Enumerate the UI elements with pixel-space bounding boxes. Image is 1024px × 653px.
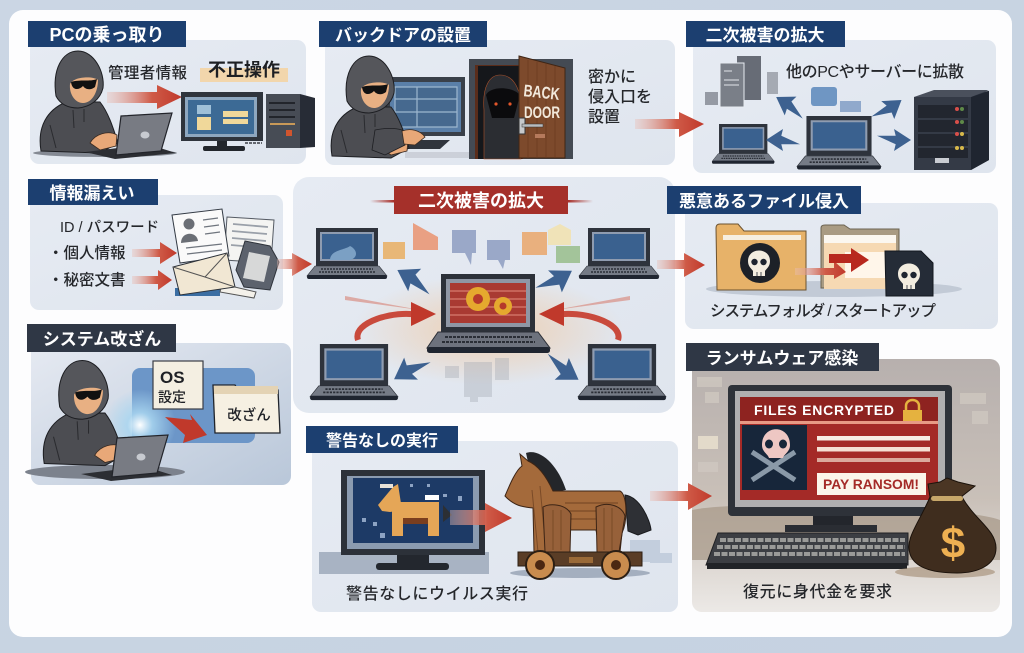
icon: bottom-left laptop xyxy=(310,344,398,400)
callout: pay ransom: PAY RANSOM! xyxy=(823,476,919,492)
arrow: centre to malicious file xyxy=(657,253,705,277)
heading: system tampering: システム改ざん xyxy=(43,329,161,349)
heading: secondary damage red xyxy=(370,186,593,214)
icon: monitor with horse xyxy=(341,470,485,570)
icon: hacker at keyboard xyxy=(331,56,425,158)
callout: tampered folder xyxy=(213,385,280,433)
icons: floating files xyxy=(383,223,580,269)
callout: unauthorized operation: 不正操作 xyxy=(208,60,280,80)
glow xyxy=(104,389,176,461)
icon: back door: DOOR xyxy=(524,103,560,122)
arrows: blue spread arrows xyxy=(766,88,911,151)
icon: chat bubbles xyxy=(811,87,861,112)
icon: server rack xyxy=(914,90,989,170)
text: covertly install entry point: 密かに xyxy=(588,68,636,86)
arrows xyxy=(132,242,177,290)
heading: execution without warning: 警告なしの実行 xyxy=(326,431,438,450)
panel: backdoor xyxy=(319,21,675,165)
heading: secondary damage red: 二次被害の拡大 xyxy=(418,191,544,211)
panel: secondary damage spread xyxy=(686,21,996,173)
callout: OS note: OS xyxy=(160,368,185,387)
shadow xyxy=(706,281,962,297)
icon: grey documents and servers xyxy=(705,56,778,107)
text: leak list xyxy=(48,219,159,289)
heading: data leak: 情報漏えい xyxy=(50,184,134,203)
heading: backdoor install: バックドアの設置 xyxy=(335,26,471,45)
icon: documents and envelope xyxy=(172,209,279,298)
icon: hacker with laptop xyxy=(25,361,185,481)
callout: OS note: 設定 xyxy=(158,389,186,405)
icon: top-left laptop xyxy=(307,228,387,279)
heading: data leak xyxy=(28,179,158,205)
icon: top-right laptop xyxy=(579,228,659,279)
icon: desktop PC xyxy=(181,92,315,151)
heading: secondary damage: 二次被害の拡大 xyxy=(706,25,824,45)
arrow: backdoor to secondary damage xyxy=(635,112,704,137)
text: spread to other PCs and servers: 他のPCやサーバーに拡散 xyxy=(786,63,964,81)
icon: bottom-right laptop xyxy=(578,344,666,400)
heading: PC takeover xyxy=(28,21,186,47)
icon: trojan horse xyxy=(505,452,651,579)
icon: skull and crossbones xyxy=(742,425,807,490)
arrow xyxy=(450,503,512,532)
heading: system tampering xyxy=(27,324,176,352)
icon: left laptop xyxy=(712,124,774,164)
text: leak list: ・個人情報 xyxy=(48,244,126,262)
background shapes behind horse xyxy=(630,540,672,563)
desk xyxy=(692,505,1000,560)
icon: faint city silhouette xyxy=(445,358,509,402)
icon: padlock xyxy=(903,400,922,421)
heading: execution without warning xyxy=(306,426,458,453)
panel: execution without warning xyxy=(306,426,678,612)
arrow xyxy=(165,414,207,443)
icon: keyboard xyxy=(706,533,908,569)
arrow: execution to ransomware xyxy=(650,483,712,510)
heading: secondary damage xyxy=(686,21,845,47)
icon: back door: BACK xyxy=(523,81,561,104)
icon: money bag xyxy=(895,478,996,578)
icon: hacker with laptop xyxy=(33,51,177,159)
icon: back door xyxy=(469,56,573,159)
arrow xyxy=(107,85,182,109)
heading: malicious file: 悪意あるファイル侵入 xyxy=(679,191,849,211)
icon: monitor with ransom screen: FILES ENCRYPTED xyxy=(754,402,894,418)
heading: backdoor install xyxy=(319,21,487,47)
panel: system tampering xyxy=(25,324,291,485)
icon: monitor with ransom screen xyxy=(728,385,952,532)
heading: ransomware infection: ランサムウェア感染 xyxy=(706,348,858,368)
panel: malicious file intrusion xyxy=(667,186,998,329)
callout: tampered folder: 改ざん xyxy=(227,406,271,424)
icon: skull folder xyxy=(716,224,806,290)
text: covertly install entry point xyxy=(588,68,652,126)
panel: centre secondary damage xyxy=(293,177,675,413)
panel: data leak xyxy=(28,179,283,310)
icon: skull file xyxy=(885,251,933,296)
text: covertly install entry point: 設置 xyxy=(588,108,620,126)
glow behind central laptop xyxy=(353,275,623,385)
heading: malicious file xyxy=(667,186,861,214)
arrows: blue outward arrows xyxy=(387,259,586,391)
text: leak list: ID / パスワード xyxy=(60,219,159,236)
text: virus runs without warning: 警告なしにウイルス実行 xyxy=(346,584,528,603)
arrows: file moving xyxy=(795,248,869,279)
callout: OS note xyxy=(153,361,203,409)
wall bricks xyxy=(697,377,988,472)
text: leak list: ・秘密文書 xyxy=(48,271,126,289)
panel: ransomware infection xyxy=(686,343,1000,612)
text: covertly install entry point: 侵入口を xyxy=(588,88,652,106)
arrow: data leak to centre xyxy=(277,253,312,276)
heading: PC takeover: PCの乗っ取り xyxy=(49,25,165,45)
panel: PC takeover xyxy=(28,21,315,164)
callout: pay ransom xyxy=(817,473,926,495)
text: system folder / startup: システムフォルダ / スタートアップ xyxy=(710,301,936,320)
text: admin info: 管理者情報 xyxy=(108,64,187,82)
icon: money bag: $ xyxy=(941,519,965,568)
icon: open folder xyxy=(821,225,899,289)
text: ransom demand: 復元に身代金を要求 xyxy=(743,583,892,601)
icon: blue backdrop xyxy=(132,368,255,443)
arrows: red incoming curved arrows xyxy=(345,296,630,340)
floor xyxy=(319,552,489,574)
icon: monitor with table xyxy=(385,77,469,158)
heading: ransomware infection xyxy=(686,343,879,371)
icon: centre laptop xyxy=(797,116,881,170)
icon: central infected laptop xyxy=(427,274,550,353)
